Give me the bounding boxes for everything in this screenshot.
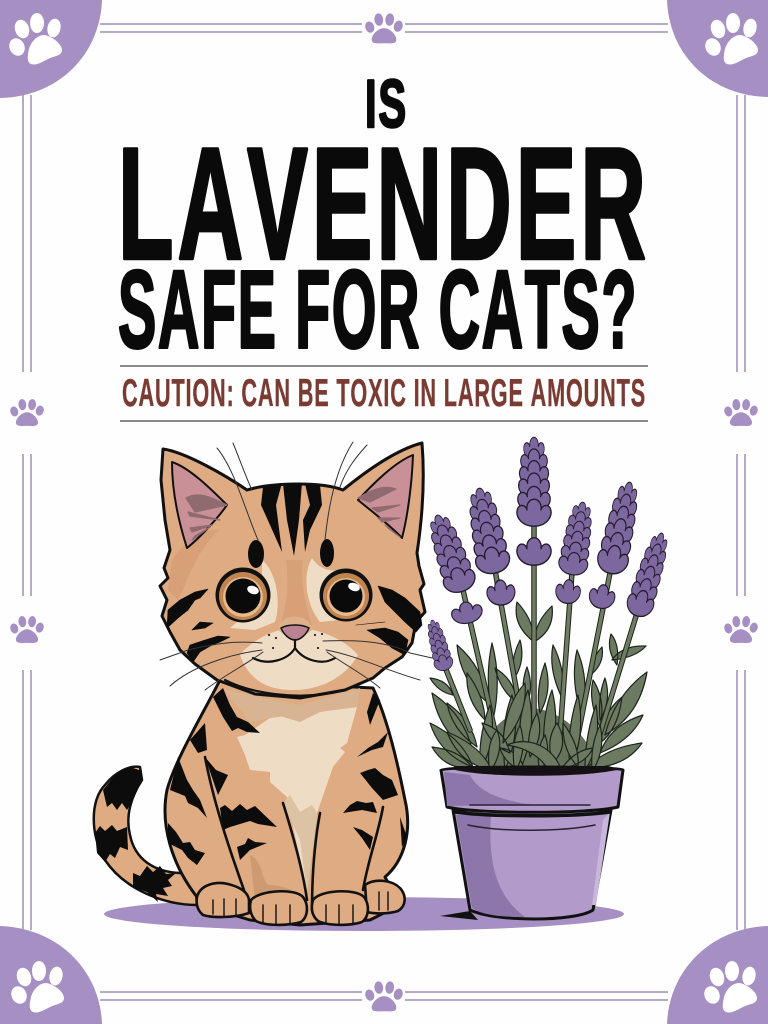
title line: IS: IS	[365, 66, 408, 142]
right ear inner	[358, 455, 413, 538]
illustration: cat	[94, 442, 432, 925]
icon: paw right upper	[723, 399, 759, 426]
chin line	[225, 680, 345, 696]
left eye	[216, 568, 270, 622]
corner badge: top left	[0, 0, 102, 98]
corner badge: bottom left	[0, 926, 102, 1024]
flower pot	[441, 766, 623, 919]
cat paws	[197, 881, 405, 925]
brow spots	[248, 540, 264, 568]
corner badge: bottom right	[667, 926, 768, 1024]
cat head shading	[168, 530, 312, 625]
illustration: potted lavender	[422, 437, 675, 920]
front left paw	[250, 891, 307, 925]
lavender flower spikes	[422, 437, 675, 673]
corner badge: top right	[667, 0, 768, 97]
cat muzzle	[240, 628, 358, 690]
cat head	[160, 443, 425, 698]
forehead stripes	[261, 483, 322, 556]
cat eye patches	[230, 558, 345, 630]
lavender lower buds	[450, 538, 617, 626]
cat front legs	[205, 757, 383, 910]
back right paw	[365, 881, 405, 913]
cat body	[165, 680, 408, 925]
title	[118, 66, 650, 372]
right eye	[320, 568, 372, 622]
front foliage	[430, 683, 643, 772]
front right paw	[312, 891, 368, 925]
ground shadow	[104, 897, 624, 931]
back left paw	[197, 883, 249, 917]
whisker dots	[268, 633, 323, 649]
foliage mound	[478, 708, 598, 770]
icon: paw right lower	[723, 616, 759, 643]
cat tail	[94, 767, 197, 905]
lavender stem colour	[445, 520, 637, 750]
icon: paw left lower	[9, 616, 45, 643]
lavender stems	[445, 520, 637, 750]
cheek stripes	[167, 586, 422, 662]
icon: paw left upper	[9, 399, 45, 426]
icon: paw bottom	[364, 981, 404, 1011]
cat whiskers	[160, 442, 432, 690]
pot shading	[456, 815, 525, 917]
cat mouth	[253, 640, 335, 662]
back foliage	[430, 602, 647, 753]
icon: paw top	[364, 13, 404, 43]
pot body	[453, 810, 611, 919]
left ear inner	[172, 462, 227, 548]
cat nose	[281, 625, 309, 640]
pot rim	[441, 767, 623, 812]
pot shadow	[440, 911, 478, 920]
